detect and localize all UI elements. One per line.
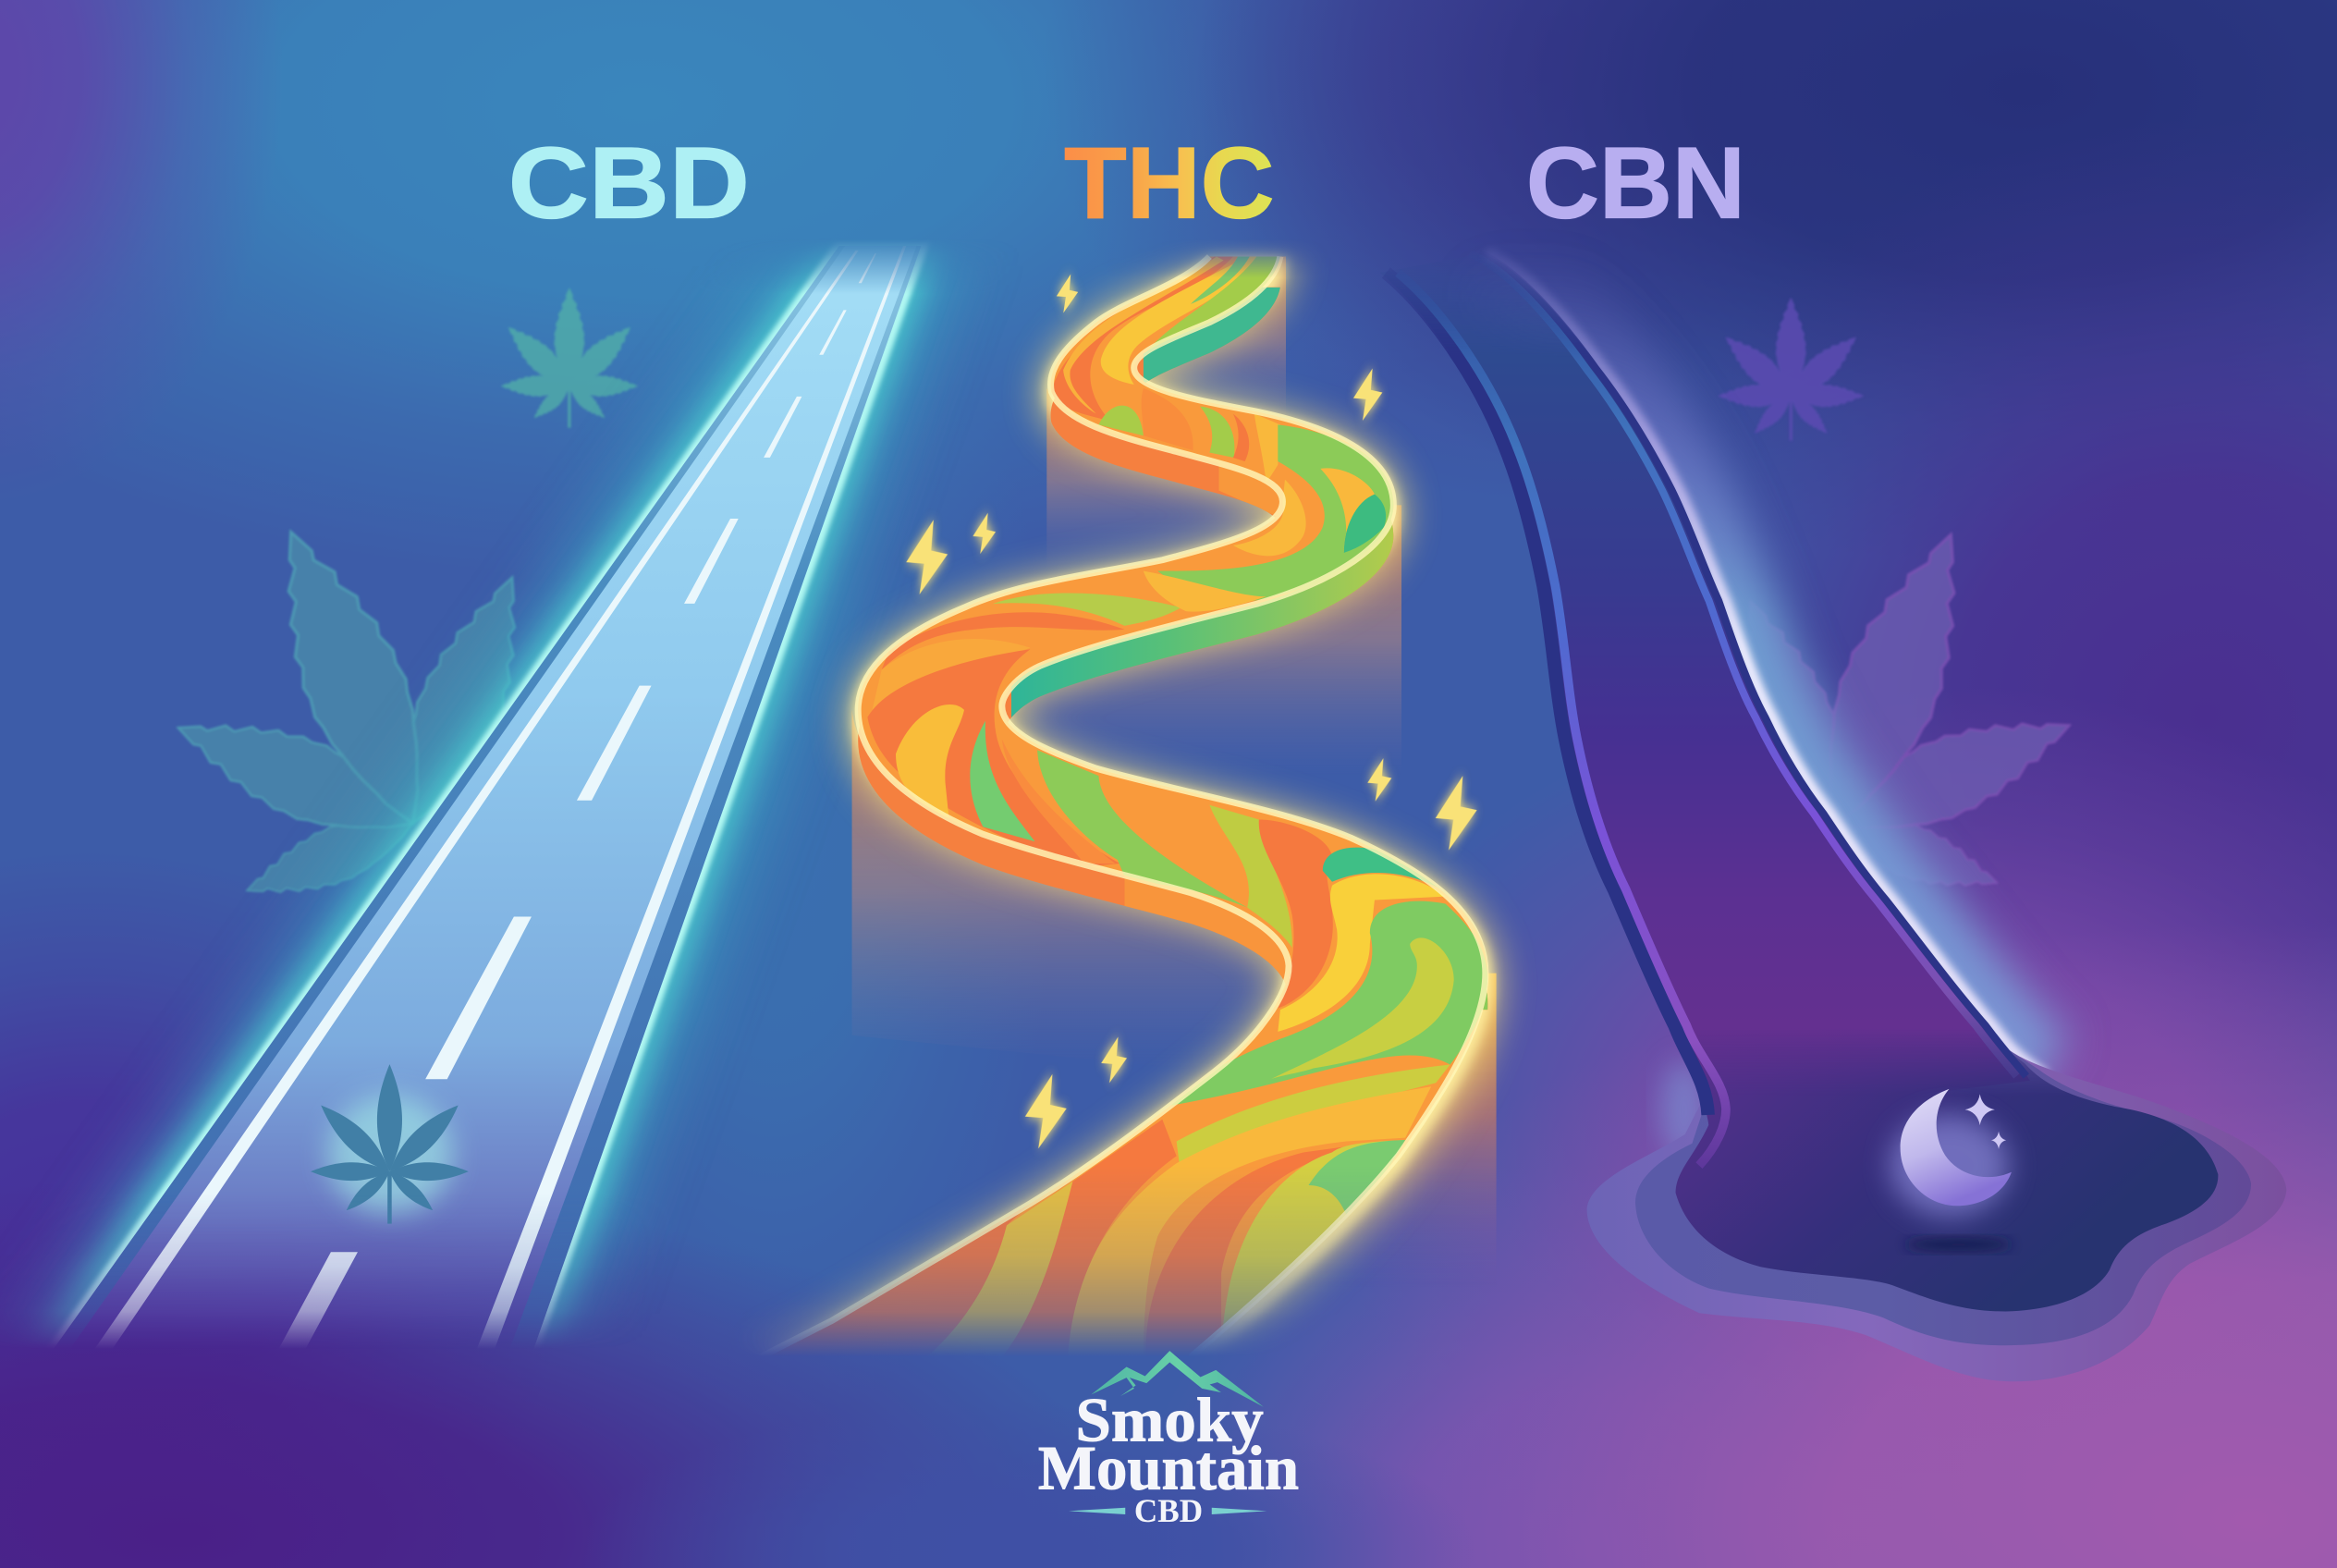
logo text: CBD: CBD <box>1134 1492 1203 1529</box>
icon: cannabis leaf on road <box>311 1064 469 1224</box>
icon: bolt lower large <box>1025 1074 1067 1148</box>
icon: bolt right small <box>1367 758 1391 802</box>
heading: CBD: CBD <box>508 127 750 239</box>
road surface <box>54 246 921 1349</box>
icon: bolt lower small <box>1101 1036 1127 1083</box>
road surface with colour swirls <box>761 257 1487 1357</box>
road side band <box>761 257 1502 1388</box>
logo text: Smoky: Smoky <box>1076 1385 1264 1454</box>
hillside glow <box>1483 253 2045 1161</box>
background leaf: CBN upper <box>1717 298 1866 441</box>
centre dashes <box>278 253 876 1349</box>
leaf glow on road <box>328 1096 453 1215</box>
THC side walls <box>852 257 1497 1288</box>
icon: mountains <box>1091 1351 1264 1407</box>
road glow <box>761 263 1487 1365</box>
icon: bolt upper left <box>1057 274 1078 312</box>
road edge lines <box>761 257 1486 1357</box>
pool layers <box>1587 1026 2286 1381</box>
heading: THC: THC <box>1064 127 1274 239</box>
road glow <box>54 246 923 1349</box>
CBD straight highway <box>54 246 923 1356</box>
icon: small star <box>1991 1132 2006 1149</box>
background leaf: CBN large <box>1716 517 2085 908</box>
road wide halo <box>761 267 1487 1368</box>
pool dark water <box>1676 1017 2218 1312</box>
icon: bolt upper right <box>1353 369 1382 421</box>
road edge bands <box>1386 253 2026 1166</box>
lightning bolts <box>906 274 1477 1148</box>
CBN falling road and pool <box>1380 253 2286 1381</box>
shadow under moon <box>1904 1238 2013 1251</box>
logo: Smoky Mountain CBD <box>1038 1351 1299 1529</box>
logo side rules <box>1069 1508 1266 1514</box>
icon: crescent moon <box>1901 1089 2012 1206</box>
background leaf: CBD upper <box>499 288 640 428</box>
icon: bolt left large <box>906 520 948 594</box>
heading: CBN: CBN <box>1526 127 1745 239</box>
icon: bolt right large <box>1436 776 1477 851</box>
icon: bolt left small <box>973 513 996 554</box>
white lane lines <box>90 246 906 1356</box>
moon glow <box>1890 1115 2009 1217</box>
road edge stripes <box>54 246 921 1349</box>
logo text: Mountain: Mountain <box>1038 1434 1299 1503</box>
background leaf: CBD large <box>164 513 551 916</box>
road body <box>1380 253 2030 1121</box>
icon: large star <box>1965 1094 1995 1125</box>
THC winding road <box>761 257 1502 1388</box>
